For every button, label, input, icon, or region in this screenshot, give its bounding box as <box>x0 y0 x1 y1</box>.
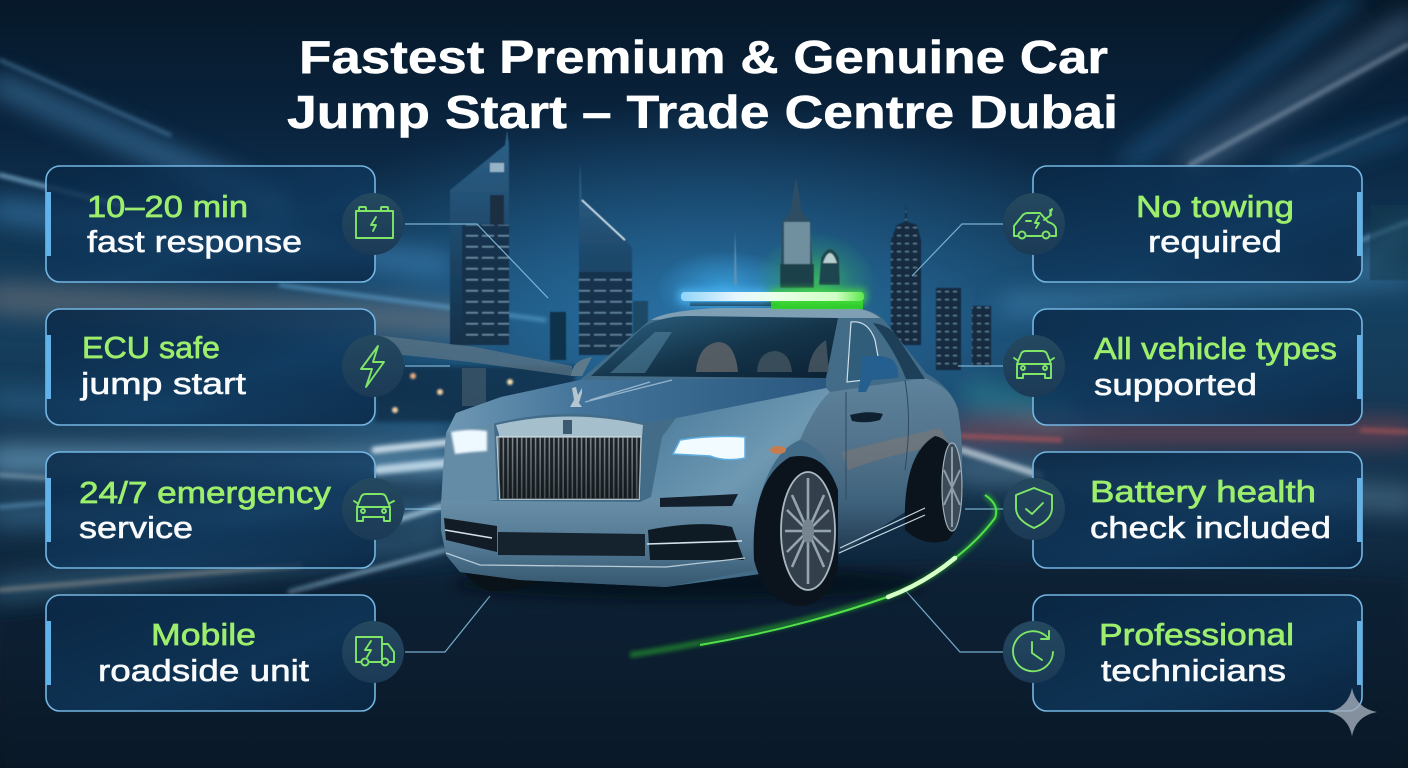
amber marker <box>770 446 786 454</box>
right headlight <box>673 436 745 460</box>
panel: Professional technicians: Professional <box>1099 617 1294 652</box>
icon: car front <box>342 478 404 540</box>
rocker trim <box>839 508 925 553</box>
panel: 10–20 min fast response: 10–20 min <box>87 189 248 224</box>
panel: No towing required: required <box>1148 224 1282 259</box>
radiator top plate <box>496 416 643 437</box>
panel: All vehicle types supported: supported <box>1094 367 1257 402</box>
left door mirror <box>571 357 592 376</box>
panel: All vehicle types supported: All vehicle types <box>1094 331 1337 366</box>
hood highlights <box>585 380 672 402</box>
icon: lightning bolt <box>342 335 404 397</box>
roof light bar <box>678 289 866 309</box>
left fender panel <box>441 423 497 505</box>
side windows <box>847 322 882 382</box>
green glow behind towers <box>753 232 877 332</box>
title: Fastest Premium & Genuine Car <box>299 31 1108 83</box>
panel: Mobile roadside unit: Mobile <box>151 617 256 652</box>
body shell <box>441 308 962 587</box>
panel: ECU safe jump start: ECU safe <box>82 330 220 365</box>
right door mirror <box>858 356 898 392</box>
sparkle watermark <box>1328 688 1377 736</box>
rear wheel <box>905 436 963 542</box>
skyline <box>450 130 1408 370</box>
elevated overpass <box>375 335 575 422</box>
panel: 24/7 emergency service: 24/7 emergency <box>79 475 332 510</box>
icon: service van <box>342 621 404 683</box>
door handle <box>850 412 883 422</box>
fender with headlight <box>651 388 830 540</box>
panel: Professional technicians: technicians <box>1101 653 1286 688</box>
side door panel <box>800 378 962 555</box>
panel: Mobile roadside unit: roadside unit <box>98 653 309 688</box>
panel: 10–20 min fast response <box>46 166 404 282</box>
lower bumper <box>441 497 756 587</box>
fog lamp slit <box>660 494 738 507</box>
title <box>287 31 1118 138</box>
title: Jump Start – Trade Centre Dubai <box>287 86 1118 138</box>
badge <box>563 420 572 434</box>
connector lines <box>405 224 1003 652</box>
light streaks <box>0 0 1408 592</box>
front wheel <box>754 456 838 606</box>
hood ornament <box>570 387 582 407</box>
panel: All vehicle types supported <box>1003 309 1362 425</box>
panel: No towing required <box>1003 166 1362 282</box>
panel: Professional technicians <box>1003 595 1362 711</box>
panel: Battery health check included: check included <box>1090 510 1331 545</box>
panel: Battery health check included: Battery health <box>1090 474 1316 509</box>
lower air intakes <box>444 518 745 567</box>
roof <box>651 308 880 320</box>
panel: 24/7 emergency service: service <box>79 510 193 545</box>
front left tire <box>458 560 546 591</box>
panel: Battery health check included <box>1003 452 1362 568</box>
radiator grille <box>497 437 641 499</box>
windshield <box>591 316 838 378</box>
panel: 10–20 min fast response: fast response <box>87 224 302 259</box>
panel: Mobile roadside unit <box>46 595 404 711</box>
seats seen through windshield <box>610 332 829 373</box>
ground shadow <box>455 568 925 600</box>
left headlight <box>451 430 487 454</box>
door shut line <box>846 380 908 500</box>
panel: 24/7 emergency service <box>46 452 404 568</box>
green energy arc on road <box>630 495 996 655</box>
icon: car front <box>1003 335 1065 397</box>
reflection band on door <box>842 428 950 470</box>
glow behind light bar <box>655 250 795 326</box>
panel: No towing required: No towing <box>1136 189 1294 224</box>
icon: car battery <box>342 193 404 255</box>
panel: ECU safe jump start <box>46 309 404 425</box>
road surface <box>0 560 1408 768</box>
panel: ECU safe jump start: jump start <box>80 366 246 401</box>
icon: clock with arrow <box>1003 621 1065 683</box>
icon: shield with check <box>1003 478 1065 540</box>
icon: car with lifted bonnet <box>1003 193 1065 255</box>
hood <box>446 378 826 433</box>
car: luxury sedan with light bar <box>441 289 963 606</box>
